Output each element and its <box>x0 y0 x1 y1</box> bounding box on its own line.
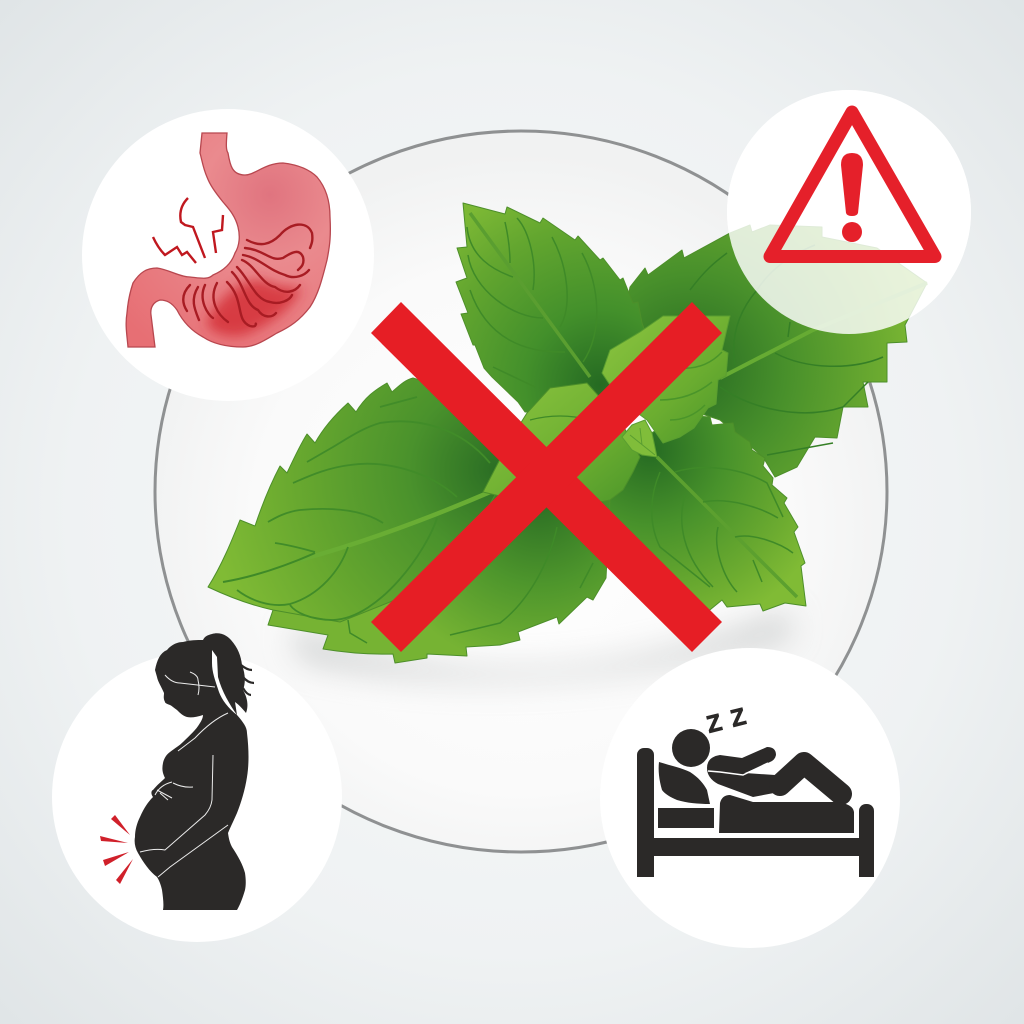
pain bolts <box>153 198 223 263</box>
icon: person lying in bed <box>637 729 874 877</box>
silhouette highlights <box>140 672 228 877</box>
stomach inflamed area <box>207 280 302 336</box>
warning circle backing <box>727 90 971 334</box>
leaf: lower right <box>600 415 806 618</box>
leaf: small center right <box>602 316 730 443</box>
circle: warning veil <box>727 90 971 334</box>
icon: warning triangle <box>770 112 935 256</box>
text: snore letters: Z <box>728 703 749 733</box>
leaf: bottom center <box>268 470 610 663</box>
text: snore letters <box>704 703 749 739</box>
ponytail gap and strands <box>212 650 237 715</box>
circle: pregnancy <box>52 633 342 942</box>
leaf shadow <box>290 610 790 681</box>
icon: pain marks <box>100 815 133 884</box>
circle: sleep <box>600 648 900 948</box>
mint leaves <box>208 203 927 663</box>
leaf: upper center <box>456 203 650 412</box>
leaf: small center left <box>483 383 640 510</box>
central ring <box>155 131 887 852</box>
leaf: upper right <box>620 225 927 477</box>
red X mark <box>371 302 722 652</box>
text: snore letters: Z <box>704 709 725 739</box>
circle: stomach <box>82 109 374 401</box>
leaf: tiny center bud <box>622 420 657 457</box>
leaf: large left <box>208 378 515 622</box>
icon: stomach <box>126 133 330 347</box>
icon: pregnant silhouette <box>100 633 254 910</box>
stomach folds <box>183 225 312 326</box>
